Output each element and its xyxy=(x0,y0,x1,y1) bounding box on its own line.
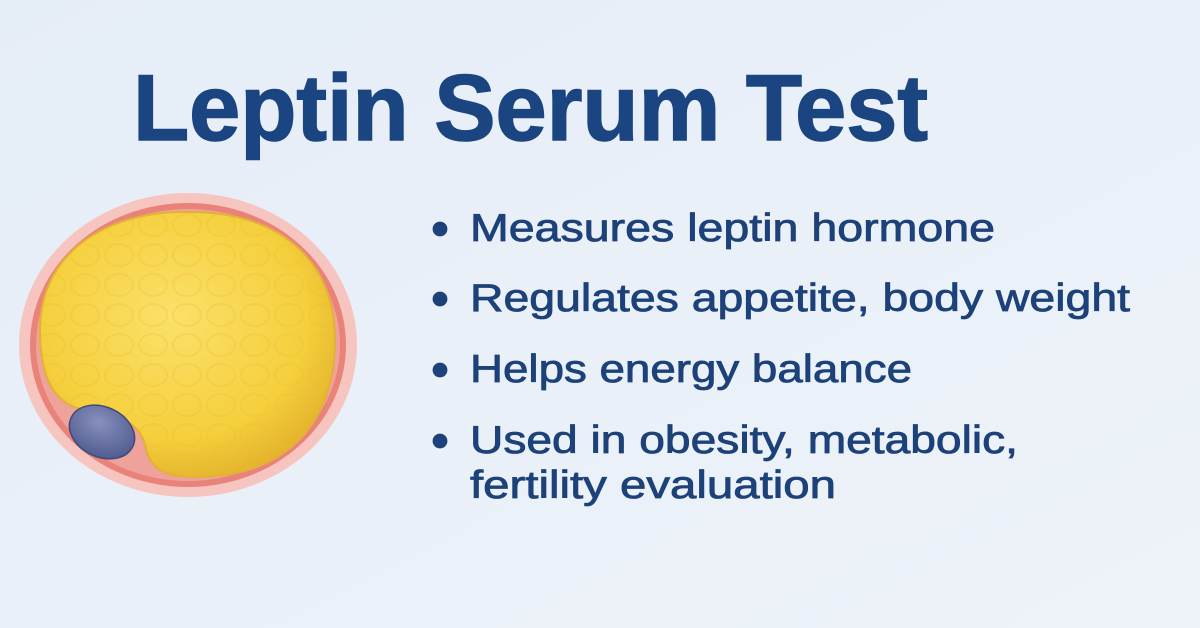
bullet 2: Regulates appetite, body weight xyxy=(470,277,1130,320)
icon: nucleus xyxy=(61,395,143,469)
bullet 3: Helps energy balance xyxy=(470,348,912,391)
illustration: fat cell xyxy=(19,193,357,497)
bullet 4 xyxy=(433,419,1018,507)
bullet 4: Used in obesity, metabolic, xyxy=(470,419,1018,462)
title: Leptin Serum Test xyxy=(133,55,928,160)
bullet 4: fertility evaluation xyxy=(470,464,836,507)
bullet list xyxy=(433,207,1130,507)
bullet 1: Measures leptin hormone xyxy=(470,207,995,250)
